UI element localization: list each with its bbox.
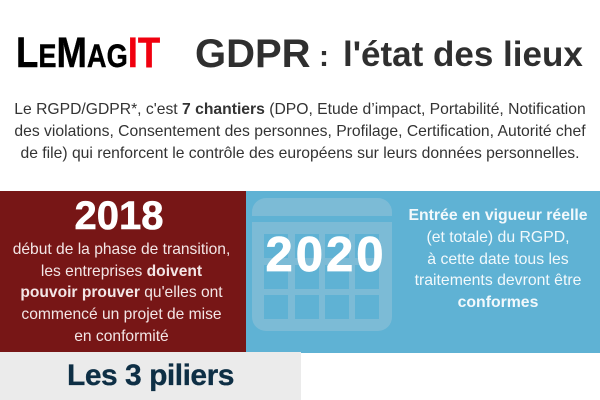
2020 description: Entrée en vigueur réelle — [408, 207, 588, 224]
icon: calendar — [252, 198, 392, 331]
intro text: des violations, Consentement des personnes, Profilage, Certification, Autorité chef — [14, 123, 586, 140]
intro text: Le RGPD/GDPR*, c'est 7 chantiers (DPO, Etude d’impact, Portabilité, Notification — [14, 101, 586, 118]
2018 description: pouvoir prouver qu'elles ont — [20, 284, 223, 301]
2020 description: conformes — [458, 294, 538, 311]
title — [195, 32, 583, 76]
intro text — [14, 101, 586, 162]
2018 description: début de la phase de transition, — [13, 241, 230, 258]
2020 description: (et totale) du RGPD, — [426, 229, 570, 246]
title: : — [319, 40, 329, 73]
2020 description — [408, 207, 588, 311]
panel: 2018 — [0, 191, 246, 352]
2020 description: traitements devront être — [415, 272, 581, 289]
panel: 2020 — [246, 191, 600, 353]
2018 description: commencé un projet de mise — [21, 306, 222, 323]
title: l'état des lieux — [343, 35, 583, 74]
2018 description: les entreprises doivent — [41, 263, 202, 280]
2018 description: en conformité — [74, 328, 169, 345]
year 2020: 2020 — [265, 228, 386, 282]
year 2018: 2018 — [74, 194, 163, 238]
heading: Les 3 piliers — [0, 352, 301, 400]
title: GDPR — [195, 32, 311, 76]
2020 description: à cette date tous les — [427, 251, 569, 268]
intro text: de file) qui renforcent le contrôle des européens sur leurs données personnelles. — [20, 145, 580, 162]
2018 description — [13, 241, 230, 345]
heading text: Les 3 piliers — [67, 359, 234, 392]
logo: LeMagIT: LEMAGIT — [16, 29, 160, 77]
